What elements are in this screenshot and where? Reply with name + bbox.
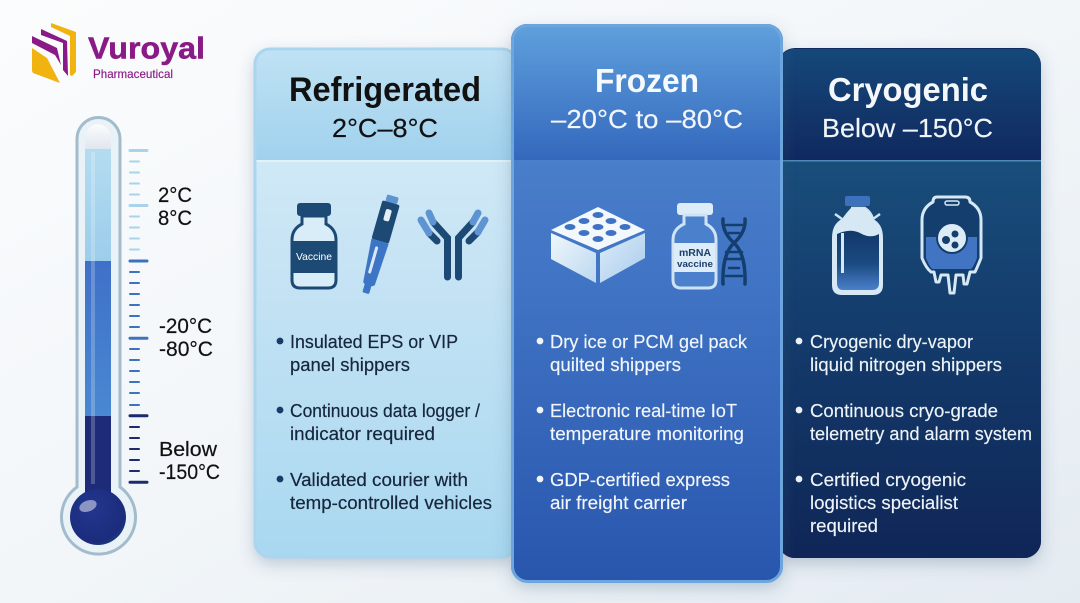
bullet: carrier: air freight carrier	[550, 492, 687, 513]
bullet: carrier	[796, 469, 966, 536]
bullet: shippers: Cryogenic dry-vapor	[810, 331, 973, 352]
thermometer glass	[62, 118, 136, 554]
panel: refrigerated	[254, 48, 518, 558]
mid blue frozen column	[85, 261, 111, 417]
icon: logo mark	[32, 23, 76, 83]
bullet: courier	[277, 469, 492, 513]
scale label: frozen range	[159, 315, 213, 361]
scale label: frozen range: -20°C	[159, 315, 212, 338]
bullet: monitoring: Continuous cryo-grade	[810, 400, 998, 421]
bullet: carrier: Certified cryogenic	[810, 469, 966, 490]
bullet: carrier	[537, 469, 730, 513]
bullet: shippers: Insulated EPS or VIP	[290, 331, 458, 352]
bullet: shippers: quilted shippers	[550, 354, 681, 375]
bullet: shippers: panel shippers	[290, 354, 410, 375]
bullet: carrier: logistics specialist	[810, 492, 959, 513]
scale label: cryogenic range	[159, 438, 220, 484]
bullet: monitoring	[277, 400, 481, 444]
temperature range: Below –150°C	[822, 113, 993, 143]
bullet: monitoring	[537, 400, 744, 444]
bullet list: refrigerated	[277, 331, 492, 513]
bullet: monitoring: indicator required	[290, 423, 435, 444]
thermometer bulb	[70, 489, 126, 545]
bullet: shippers	[796, 331, 1002, 375]
icon: mRNA vaccine vial	[673, 203, 716, 288]
thermometer white cap	[85, 124, 111, 149]
icon: mRNA vaccine vial: vaccine	[677, 259, 713, 269]
heading: Cryogenic: Cryogenic	[828, 71, 988, 108]
heading: Refrigerated: Refrigerated	[289, 71, 481, 109]
bullet: monitoring: Continuous data logger /	[290, 400, 481, 421]
icon: DNA helix	[723, 219, 745, 284]
icon: antibody	[421, 213, 485, 277]
bullet: monitoring: telemetry and alarm system	[810, 423, 1032, 444]
scale label: cryogenic range: Below	[159, 438, 217, 461]
bullet: monitoring	[796, 400, 1032, 444]
bullet: shippers: Dry ice or PCM gel pack	[550, 331, 748, 352]
temperature range: –20°C to –80°C	[551, 104, 743, 134]
bullet: courier: temp-controlled vehicles	[290, 492, 492, 513]
bullet: shippers	[277, 331, 458, 375]
icon: vaccine vial: Vaccine	[296, 251, 332, 263]
bullet list: frozen	[537, 331, 748, 513]
bullet: shippers	[537, 331, 748, 375]
icon: mRNA vaccine vial: mRNA	[679, 247, 711, 259]
bullet: courier: Validated courier with	[290, 469, 468, 490]
icon: dry ice block	[551, 207, 645, 283]
thermometer	[62, 118, 136, 554]
dark navy cryogenic column	[85, 416, 111, 496]
heading: Frozen: Frozen	[595, 62, 699, 99]
icon: cryo blood bag	[922, 197, 981, 293]
scale label: cryogenic range: -150°C	[159, 460, 220, 484]
panel: cryogenic	[778, 48, 1041, 558]
scale label: refrigerated range: 2°C	[158, 184, 192, 207]
logo subtitle: Pharmaceutical	[93, 67, 173, 81]
bullet: monitoring: Electronic real-time IoT	[550, 400, 738, 421]
logo: Vuroyal Pharmaceutical	[32, 23, 205, 83]
bullet: carrier: required	[810, 515, 878, 536]
scale label: refrigerated range: 8°C	[158, 207, 192, 230]
temperature range: 2°C–8°C	[332, 113, 438, 143]
bullet: monitoring: temperature monitoring	[550, 423, 744, 444]
logo wordmark: Vuroyal	[88, 30, 205, 66]
light blue refrigerated column	[85, 149, 111, 261]
thermometer scale ticks	[130, 150, 147, 482]
bullet: shippers: liquid nitrogen shippers	[810, 354, 1002, 375]
icon: dewar flask	[832, 196, 883, 295]
bullet: carrier: GDP-certified express	[550, 469, 730, 490]
bullet list: cryogenic	[796, 331, 1032, 536]
scale label: frozen range: -80°C	[159, 338, 213, 361]
icon: injection pen	[357, 193, 402, 296]
scale label: refrigerated range	[158, 184, 192, 230]
icon: vaccine vial	[292, 203, 336, 288]
panel: frozen	[511, 24, 783, 582]
